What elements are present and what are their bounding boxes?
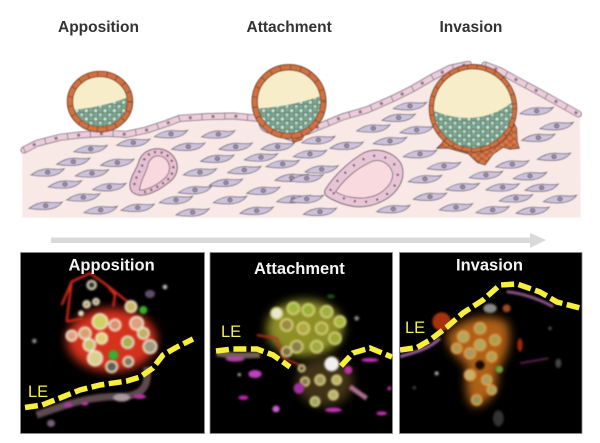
epithelium fluorescence [217,294,391,415]
panel: Apposition micrograph [20,252,204,434]
uterine gland right [325,150,403,207]
stromal cells [29,102,577,216]
uterine stroma tissue [22,64,581,218]
LE dashed line [400,284,580,350]
blastocyst: apposition [70,74,130,129]
epithelium fluorescence [400,292,561,426]
LE label: LE [405,319,425,337]
heading: Invasion: Invasion [440,19,502,36]
illustration: implantation stages in tissue [22,64,581,218]
heading: Attachment: Attachment [246,19,332,36]
panel: Attachment micrograph [210,252,392,434]
blastocyst: attachment [255,67,323,143]
panel: Invasion micrograph [400,252,582,434]
heading: Apposition: Apposition [58,19,139,36]
uterine gland left [130,149,177,195]
progress arrow [51,233,546,248]
panel title: Invasion [456,256,523,274]
panel title: Attachment [254,260,345,278]
LE dashed line [25,339,193,408]
epithelium fluorescence [32,285,167,427]
LE label: LE [28,383,48,401]
LE label: LE [221,323,241,341]
blastocyst: invasion [431,67,519,165]
LE dashed line [216,349,290,367]
blastocyst fluorescence [257,300,353,407]
blastocyst fluorescence [432,312,509,407]
panel title: Apposition [68,256,155,274]
luminal epithelium [24,64,578,150]
blastocyst fluorescence [62,273,157,372]
